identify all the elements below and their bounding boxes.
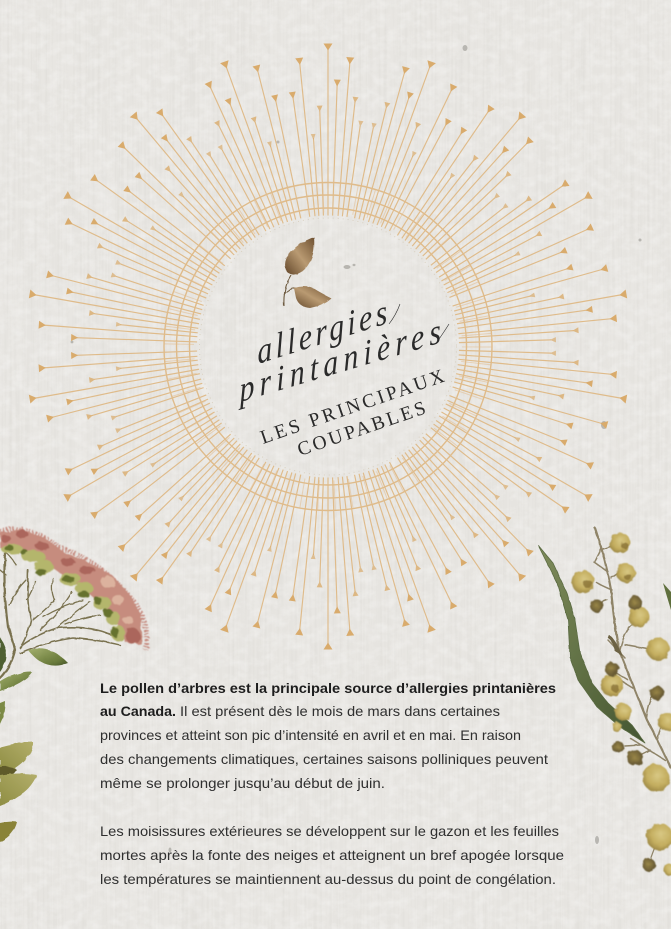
- subtitle: les principaux coupables: LES PRINCIPAUX: [258, 366, 447, 449]
- text block: tree pollen paragraph: Il est présent dès le mois de mars dans certaines: [180, 703, 500, 719]
- icon: two brown leaves: [284, 237, 331, 308]
- text block: tree pollen paragraph: des changements climatiques, certaines saisons polliniques peuvent: [100, 751, 548, 767]
- text block: outdoor moulds paragraph: Les moisissures extérieures se développent sur le gazon et les feuilles: [100, 823, 559, 839]
- text block: outdoor moulds paragraph: mortes après la fonte des neiges et atteignent un bref apogée lorsque: [100, 847, 564, 863]
- text block: tree pollen paragraph: Le pollen d’arbres est la principale source d’allergies printanières: [100, 680, 556, 696]
- sunburst ring of gold rays: [0, 7, 655, 688]
- subtitle: les principaux coupables: COUPABLES: [295, 398, 429, 461]
- text block: outdoor moulds paragraph: [100, 823, 564, 887]
- text block: tree pollen paragraph: [100, 680, 556, 791]
- text block: tree pollen paragraph: même se prolonger jusqu’au début de juin.: [100, 775, 385, 791]
- left plant: pink flowering sprig and leaves: [0, 529, 147, 842]
- text block: tree pollen paragraph: provinces et atteint son pic d’intensité en avril et en mai. En raison: [100, 727, 521, 743]
- text block: tree pollen paragraph: au Canada.: [100, 703, 176, 719]
- title: allergies printanières: printanières: [237, 311, 442, 411]
- title: allergies printanières: allergies: [256, 292, 388, 373]
- right plant: mimosa sprig with long leaf: [538, 528, 671, 876]
- text block: outdoor moulds paragraph: les températures se maintiennent au-dessus du point de congélation.: [100, 871, 556, 887]
